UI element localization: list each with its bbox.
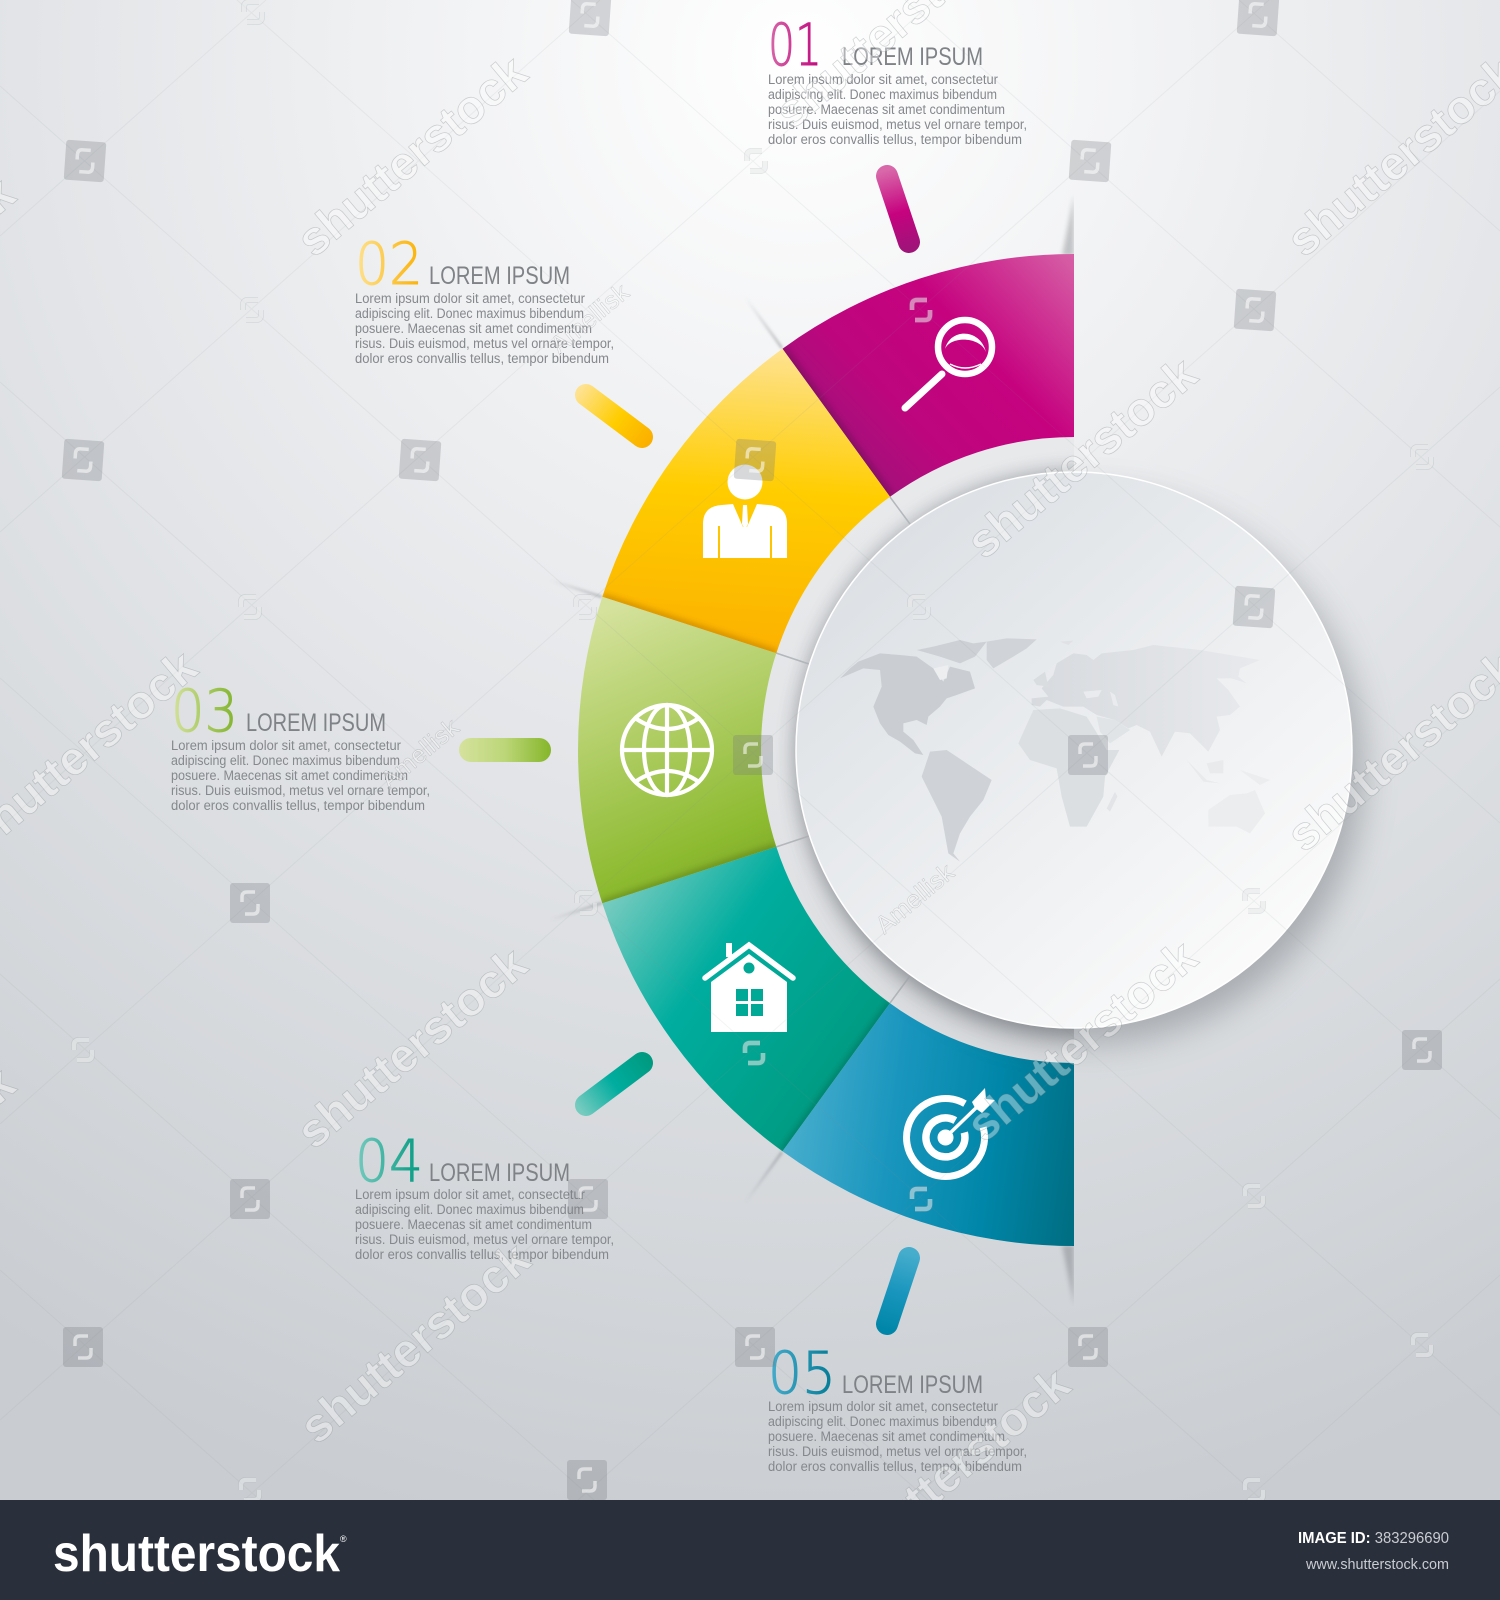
text block 01: risus. Duis euismod, metus vel ornare tempor, xyxy=(768,117,1027,132)
text block 05 xyxy=(768,1339,1027,1474)
text block 02: dolor eros convallis tellus, tempor bibendum xyxy=(355,351,609,366)
radial creases and fold lines xyxy=(550,195,1074,1305)
pill marker 4 xyxy=(586,1063,642,1105)
text block 03: 03 xyxy=(171,677,238,745)
text block 01: dolor eros convallis tellus, tempor bibendum xyxy=(768,132,1022,147)
watermark overlay: Amellisk xyxy=(545,278,635,360)
text block 04: Lorem ipsum dolor sit amet, consectetur xyxy=(355,1187,585,1202)
inner half ring xyxy=(776,452,1074,1046)
text block 02: LOREM IPSUM xyxy=(429,262,570,290)
footer bar xyxy=(0,1500,1500,1600)
watermark overlay: shutterstock xyxy=(956,346,1207,568)
text block 01: adipiscing elit. Donec maximus bibendum xyxy=(768,87,997,102)
central circle xyxy=(796,472,1352,1028)
watermark overlay: shutterstock xyxy=(286,936,537,1158)
text block 04: posuere. Maecenas sit amet condimentum xyxy=(355,1217,592,1232)
segment 4: teal xyxy=(602,847,890,1151)
watermark overlay: shutterstock xyxy=(286,44,537,266)
pill marker 5 xyxy=(887,1258,909,1324)
text block 04: 04 xyxy=(355,1127,423,1195)
icon: target with arrow xyxy=(907,1088,995,1176)
registered mark: ® xyxy=(340,1534,347,1544)
text block 05: Lorem ipsum dolor sit amet, consectetur xyxy=(768,1399,998,1414)
text block 01: Lorem ipsum dolor sit amet, consectetur xyxy=(768,72,998,87)
text block 05: risus. Duis euismod, metus vel ornare tempor, xyxy=(768,1444,1027,1459)
text block 05: LOREM IPSUM xyxy=(842,1371,983,1399)
text block 02: Lorem ipsum dolor sit amet, consectetur xyxy=(355,291,585,306)
segment 5: blue xyxy=(782,1003,1074,1246)
text block 01: posuere. Maecenas sit amet condimentum xyxy=(768,102,1005,117)
text block 04: LOREM IPSUM xyxy=(429,1159,570,1187)
icon: house xyxy=(705,943,793,1032)
segment 3: green xyxy=(578,597,776,903)
text block 03: risus. Duis euismod, metus vel ornare tempor, xyxy=(171,783,430,798)
text block 01: 01 xyxy=(768,11,822,79)
segment 2: yellow xyxy=(602,349,890,653)
website: www.shutterstock.com xyxy=(1305,1556,1449,1573)
icon: magnifier xyxy=(905,320,992,408)
text block 02: 02 xyxy=(355,230,423,298)
central circle shadow xyxy=(812,492,1364,1044)
text block 01 xyxy=(768,11,1027,147)
pill marker 3 xyxy=(459,738,551,762)
image id: IMAGE ID: 383296690 xyxy=(1298,1530,1449,1547)
text block 02: adipiscing elit. Donec maximus bibendum xyxy=(355,306,584,321)
text block 03: dolor eros convallis tellus, tempor bibendum xyxy=(171,798,425,813)
watermark overlay: shutterstock xyxy=(956,929,1207,1151)
segment edge shadows xyxy=(602,349,890,1151)
watermark overlay: Amellisk xyxy=(870,858,960,940)
text block 05: adipiscing elit. Donec maximus bibendum xyxy=(768,1414,997,1429)
icon: globe xyxy=(622,705,712,795)
watermark overlay: shutterstock xyxy=(829,1356,1080,1578)
text block 03 xyxy=(171,677,430,813)
watermark overlay: Amellisk xyxy=(375,713,465,795)
text block 04 xyxy=(355,1127,614,1262)
text block 04: adipiscing elit. Donec maximus bibendum xyxy=(355,1202,584,1217)
segment 1: magenta xyxy=(782,254,1074,497)
text block 05: dolor eros convallis tellus, tempor bibendum xyxy=(768,1459,1022,1474)
text block 03: Lorem ipsum dolor sit amet, consectetur xyxy=(171,738,401,753)
icon: businessman xyxy=(703,464,787,558)
text block 03: posuere. Maecenas sit amet condimentum xyxy=(171,768,408,783)
text block 01: LOREM IPSUM xyxy=(842,43,983,71)
world map xyxy=(840,638,1270,862)
text block 02: posuere. Maecenas sit amet condimentum xyxy=(355,321,592,336)
text block 03: LOREM IPSUM xyxy=(246,709,386,737)
pill marker 1 xyxy=(887,176,909,242)
watermark overlay: shutterstock xyxy=(289,1231,540,1453)
footer logo: shutterstock xyxy=(53,1525,340,1583)
pill marker 2 xyxy=(586,395,642,437)
text block 05: 05 xyxy=(768,1339,836,1407)
text block 04: dolor eros convallis tellus, tempor bibendum xyxy=(355,1247,609,1262)
ring of five segments xyxy=(578,254,1074,1246)
text block 04: risus. Duis euismod, metus vel ornare tempor, xyxy=(355,1232,614,1247)
text block 03: adipiscing elit. Donec maximus bibendum xyxy=(171,753,400,768)
text block 05: posuere. Maecenas sit amet condimentum xyxy=(768,1429,1005,1444)
text block 02 xyxy=(355,230,614,366)
text block 02: risus. Duis euismod, metus vel ornare tempor, xyxy=(355,336,614,351)
